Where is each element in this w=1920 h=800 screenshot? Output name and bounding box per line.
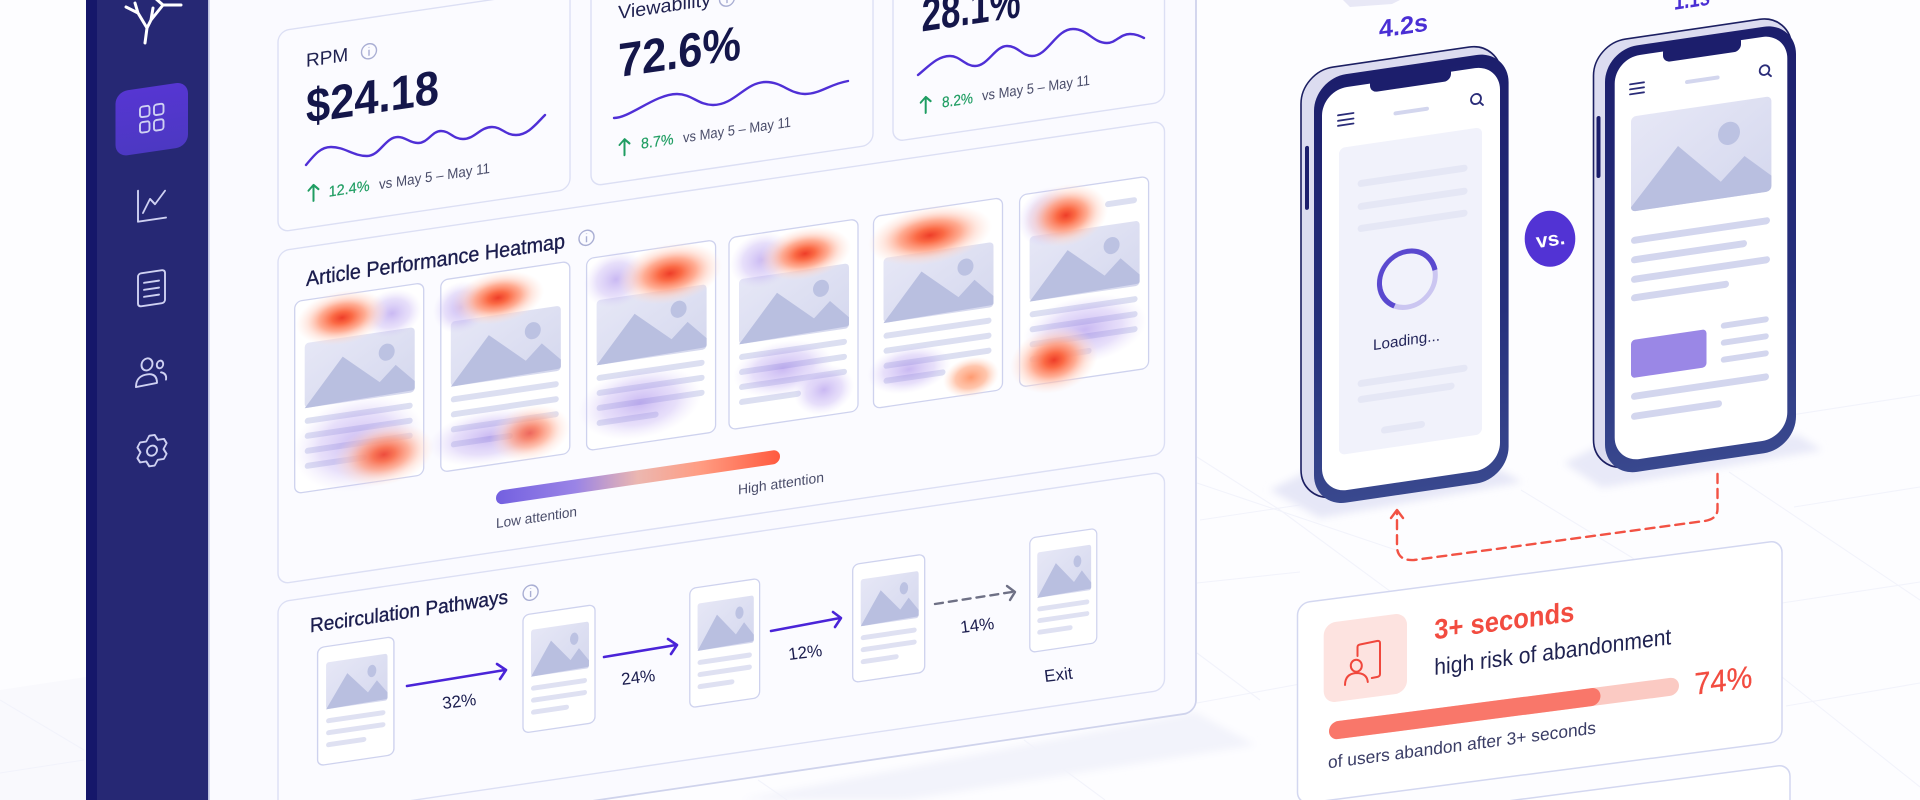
article thumbnail 4 [729, 218, 858, 430]
dashed abandonment connector [1391, 474, 1718, 560]
ad side lines [1721, 316, 1769, 363]
icon: document [138, 270, 165, 307]
loading text: Loading... [1373, 327, 1440, 354]
menu icon [1630, 82, 1644, 94]
flow arrows [407, 586, 1074, 713]
phone body [1594, 14, 1796, 478]
abandonment card [1298, 540, 1782, 800]
subheading: high risk of abandonment [1434, 623, 1672, 680]
info icon [362, 43, 376, 60]
RPM change: 12.4% [329, 178, 370, 201]
versus badge: vs. [1535, 227, 1566, 253]
panel: recirculation pathways [278, 472, 1164, 800]
icon: person and document [1345, 641, 1380, 685]
title bar [1394, 106, 1429, 116]
article thumbnail 5 [867, 196, 1002, 413]
lower text lines [1631, 373, 1769, 420]
card: RPM [278, 0, 570, 232]
nav items [116, 81, 188, 471]
page card 2 [523, 605, 595, 733]
trend up arrow [921, 96, 931, 114]
RPM value: $24.18 [306, 61, 439, 134]
arrow 32% [407, 664, 506, 686]
arrow 12% [771, 612, 841, 631]
article thumbnail 3 [578, 236, 722, 452]
article image [1631, 96, 1771, 212]
24% label: 24% [620, 666, 656, 689]
Viewability comparison: vs May 5 – May 11 [683, 115, 791, 147]
RPM sparkline [306, 115, 545, 165]
metric sparkline [918, 29, 1144, 75]
ad block [1631, 329, 1706, 378]
article thumbnail 1 [293, 277, 434, 501]
14% label: 14% [959, 614, 995, 637]
recirculation heading: Recirculation Pathways [310, 586, 508, 637]
Viewability value: 72.6% [618, 16, 741, 88]
active nav button [116, 81, 188, 157]
search icon [1760, 64, 1771, 78]
Viewability sparkline [614, 81, 848, 118]
logo: tree [126, 0, 181, 43]
phone body [1301, 41, 1509, 509]
search icon [1471, 93, 1483, 107]
info icon [523, 584, 538, 601]
fast phone [1594, 14, 1796, 478]
metric comparison: vs May 5 – May 11 [982, 73, 1090, 105]
arrow 24% [604, 639, 677, 657]
trend up arrow [308, 184, 318, 202]
panel shadow [740, 712, 1255, 800]
attention scale bar [496, 449, 780, 505]
32% label: 32% [441, 690, 477, 713]
panel: article performance heatmap [278, 121, 1164, 584]
progress fill [1329, 687, 1600, 740]
info icon [579, 229, 594, 246]
heatmap heading: Article Performance Heatmap [306, 230, 565, 291]
loading placeholder card [1339, 127, 1482, 455]
dashboard sidebar [86, 0, 209, 800]
menu icon [1338, 113, 1354, 126]
heading: 3+ seconds: 3+ seconds [1434, 596, 1574, 645]
article thumbnail 6 [1010, 172, 1149, 400]
card: third metric [893, 0, 1164, 142]
slow load time: 4.2s [1379, 9, 1428, 44]
icon: settings gear [137, 433, 167, 468]
slow phone [1301, 41, 1509, 509]
RPM label: RPM [306, 45, 348, 72]
arrow 14% dashed [935, 586, 1015, 604]
high attention label: High attention [738, 469, 824, 497]
info icon [720, 0, 734, 7]
exit label: Exit [1043, 664, 1074, 686]
loading spinner [1379, 247, 1435, 311]
metric change: 8.2% [942, 90, 973, 112]
title bar [1685, 75, 1720, 84]
icon: users [136, 356, 166, 387]
page card 1 [318, 637, 394, 766]
Viewability change: 8.7% [641, 131, 673, 153]
card: Viewability [591, 0, 873, 186]
dashboard panel [209, 0, 1196, 800]
caption: of users abandon after 3+ seconds [1328, 718, 1596, 772]
article text lines [1631, 217, 1770, 302]
pill above slow phone [1343, 0, 1400, 7]
page card 5: exit [1030, 528, 1097, 653]
progress track [1329, 677, 1679, 740]
lower card edge [1303, 764, 1790, 800]
page card 3 [690, 578, 760, 708]
12% label: 12% [787, 641, 823, 664]
trend up arrow [620, 138, 630, 156]
page card 4 [853, 554, 925, 683]
icon box [1324, 613, 1407, 703]
versus badge [1525, 211, 1575, 267]
74% value: 74% [1694, 659, 1752, 702]
RPM comparison: vs May 5 – May 11 [379, 161, 490, 193]
phone shadows [1270, 435, 1822, 518]
icon: chart [138, 187, 166, 222]
low attention label: Low attention [496, 503, 577, 531]
article thumbnail 2 [428, 261, 570, 476]
